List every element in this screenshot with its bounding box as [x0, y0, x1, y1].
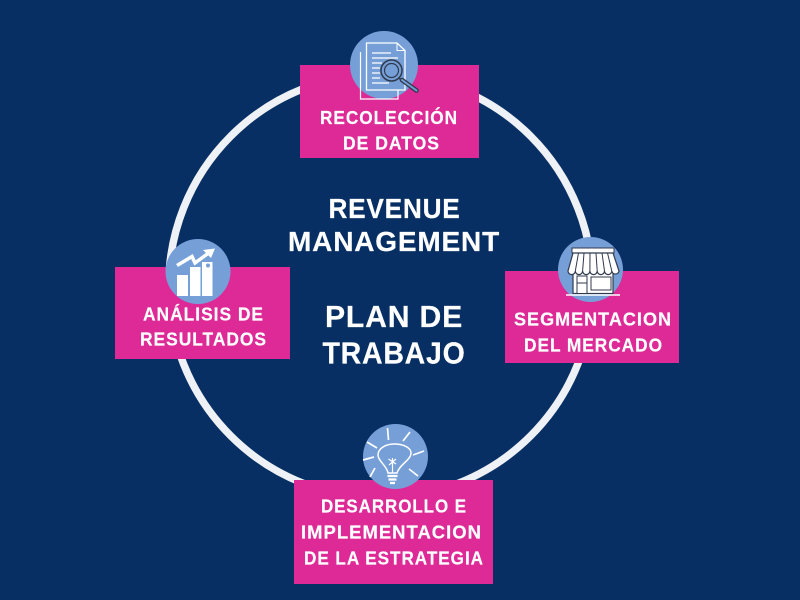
center title: revenue management: [288, 193, 500, 257]
center title: revenue management: MANAGEMENT: [288, 226, 500, 257]
label: analisis de resultados: [140, 304, 267, 350]
panel: desarrollo e implementacion de la estrategia: [294, 424, 493, 584]
label: analisis de resultados: ANÁLISIS DE: [143, 304, 264, 324]
label: desarrollo e implementacion de la estrategia: IMPLEMENTACION: [301, 522, 482, 542]
label: segmentacion del mercado: [514, 310, 672, 356]
panel: recoleccion de datos: [300, 31, 479, 158]
label: segmentacion del mercado: DEL MERCADO: [524, 336, 663, 356]
cycle ring: [169, 74, 593, 498]
panel: analisis de resultados: [115, 239, 290, 359]
center title: plan de trabajo: TRABAJO: [322, 336, 466, 370]
label: desarrollo e implementacion de la estrategia: DESARROLLO E: [321, 496, 467, 516]
label: analisis de resultados: RESULTADOS: [140, 330, 267, 350]
label: desarrollo e implementacion de la estrategia: DE LA ESTRATEGIA: [304, 548, 484, 568]
icon: document with magnifier: [350, 31, 418, 99]
icon: storefront: [558, 237, 623, 302]
center title: plan de trabajo: PLAN DE: [325, 300, 463, 334]
label: desarrollo e implementacion de la estrategia: [301, 496, 484, 568]
label: segmentacion del mercado: SEGMENTACION: [514, 310, 672, 330]
panel: segmentacion del mercado: [505, 237, 679, 363]
label: recoleccion de datos: DE DATOS: [343, 134, 440, 154]
icon: growth chart: [166, 239, 230, 304]
label: recoleccion de datos: RECOLECCIÓN: [320, 107, 458, 128]
center title: revenue management: REVENUE: [328, 193, 460, 224]
icon: light bulb: [363, 424, 428, 489]
label: recoleccion de datos: [320, 107, 458, 154]
center title: plan de trabajo: [322, 300, 466, 370]
